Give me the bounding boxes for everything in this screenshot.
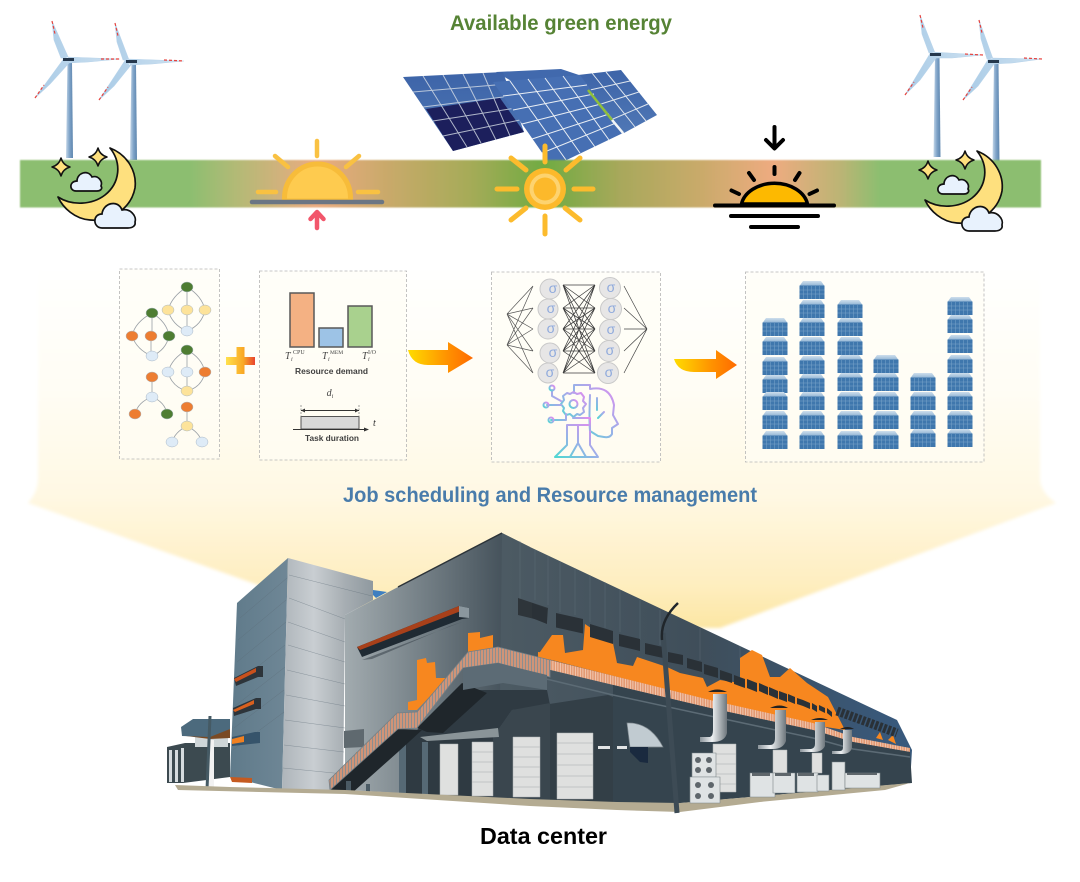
stairs railing — [329, 647, 550, 790]
tower seams — [233, 575, 372, 774]
bar labels: T — [362, 351, 369, 362]
upper stair flight — [417, 683, 487, 733]
neural network: σ — [549, 280, 558, 296]
server column 5 — [910, 373, 936, 447]
orange pixel shapes — [356, 624, 896, 766]
neural network: σ — [546, 364, 555, 380]
neural network: σ — [547, 300, 556, 316]
arrow 1 — [408, 342, 473, 373]
label: d_i: d — [327, 388, 332, 399]
icon: noon sun — [497, 146, 593, 234]
icon: AI head — [544, 385, 618, 457]
server column 6 — [948, 297, 972, 447]
neural network: σ — [608, 300, 617, 316]
AC fans — [695, 757, 877, 799]
lower stair flight — [330, 729, 422, 793]
server column 2 — [800, 281, 824, 449]
label: resource demand: Resource demand — [295, 367, 368, 376]
neural network: σ — [547, 320, 556, 336]
lower wall trim — [538, 677, 910, 757]
server column 1 — [762, 318, 788, 449]
server column 3 — [838, 300, 862, 449]
tower roof accent — [373, 590, 387, 598]
under balcony shadow — [400, 690, 550, 798]
tower right face — [282, 558, 373, 790]
panel seams — [520, 541, 740, 660]
lower vent — [344, 729, 364, 748]
balcony rail band — [538, 657, 910, 752]
panel: server allocation — [746, 272, 984, 462]
wind turbines right — [905, 15, 1042, 162]
AC units — [690, 753, 880, 803]
street lamp — [663, 633, 677, 813]
arrow 2 — [674, 350, 737, 379]
neural network: σ — [607, 321, 616, 337]
icon: moon right — [919, 151, 1002, 231]
long window main face — [357, 606, 469, 660]
neural network: σ — [549, 344, 558, 360]
task duration diagram: t — [373, 418, 376, 429]
tower left face — [230, 558, 288, 790]
bar labels: i — [368, 357, 370, 363]
lower long wall — [613, 685, 912, 803]
bar labels: T — [285, 351, 292, 362]
main roof edge — [398, 533, 502, 587]
door slats — [472, 743, 736, 787]
task duration diagram — [293, 405, 376, 432]
bar labels: i — [328, 357, 330, 363]
columns — [399, 733, 428, 796]
main face — [345, 533, 530, 800]
bar labels: i — [291, 357, 293, 363]
label: data center: Data center — [480, 823, 607, 849]
bar labels — [285, 350, 377, 363]
icon: sunrise — [252, 141, 382, 228]
block left of doors — [493, 703, 550, 800]
panel: resource demand and task duration — [260, 271, 406, 460]
title: available green energy: Available green energy — [450, 12, 672, 35]
upper vent — [518, 598, 548, 622]
data center building — [167, 533, 912, 813]
icon: sunset — [715, 127, 834, 227]
ground strip — [175, 783, 910, 812]
hood shadow — [630, 747, 648, 763]
panel: job DAG graphs — [120, 269, 220, 459]
background glow funnel — [28, 262, 1056, 628]
energy timeline bar — [20, 160, 1041, 208]
vent pipes — [700, 690, 854, 754]
bar labels: CPU — [293, 350, 305, 356]
stairs support — [346, 781, 370, 792]
far windows — [837, 711, 897, 733]
panel: neural network and AI — [492, 272, 660, 462]
hood — [627, 723, 663, 747]
heading: job scheduling and resource management: Job scheduling and Resource management — [343, 484, 757, 507]
wind turbines left — [35, 21, 184, 160]
neural network: σ — [607, 279, 616, 295]
neural network — [507, 278, 647, 384]
neural network: σ — [606, 342, 615, 358]
dark loading block — [530, 695, 613, 803]
tower windows — [230, 666, 263, 783]
doors — [440, 733, 822, 799]
camera — [598, 746, 627, 749]
balcony slab — [463, 663, 547, 690]
label: d_i: i — [332, 394, 334, 400]
door awning — [420, 728, 499, 741]
annex — [167, 716, 230, 790]
long face — [500, 533, 912, 803]
server column 4 — [874, 355, 898, 449]
windows row — [532, 603, 832, 717]
lamp arm — [662, 603, 678, 640]
icon: moon left — [52, 148, 135, 228]
bar chart: resource demand — [290, 293, 372, 347]
solar panels — [403, 69, 657, 167]
label: task duration: Task duration — [305, 434, 359, 443]
bar labels: I/O — [368, 350, 377, 356]
neural network: σ — [605, 364, 614, 380]
icon: plus — [226, 347, 255, 374]
bar labels: T — [322, 351, 329, 362]
bar labels: MEM — [330, 350, 343, 356]
